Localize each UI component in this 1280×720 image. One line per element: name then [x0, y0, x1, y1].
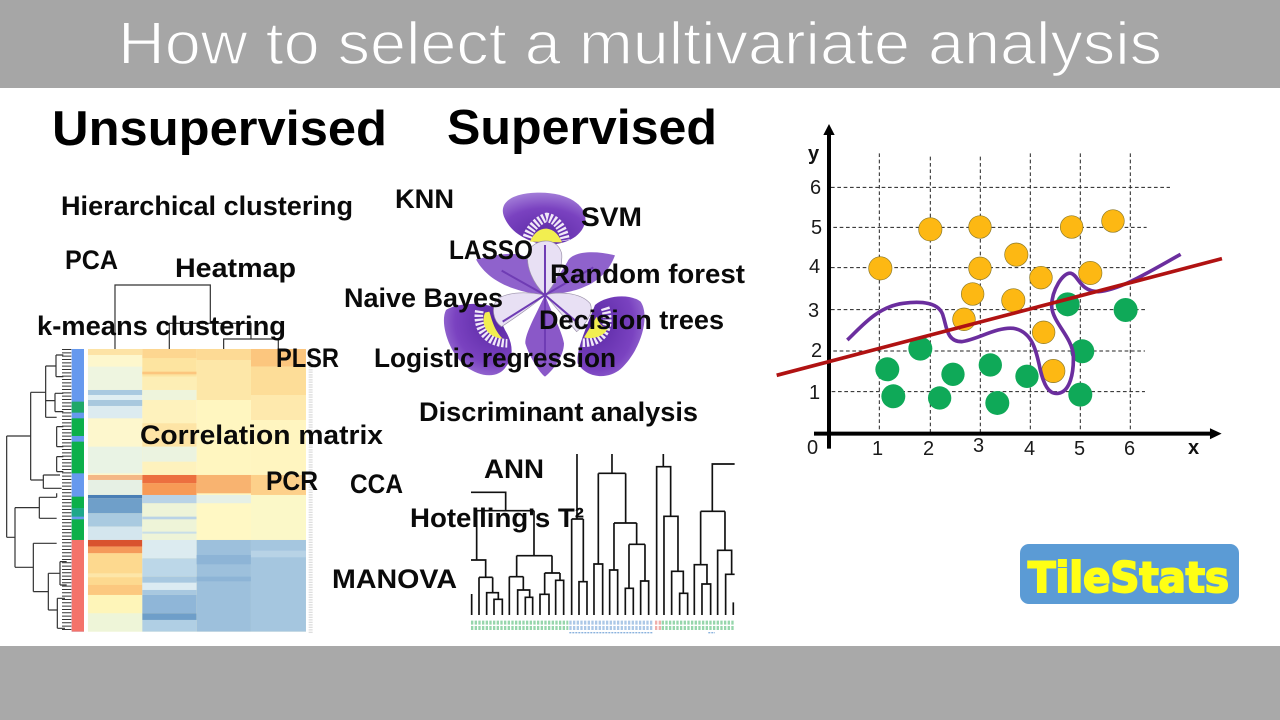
- axes: [814, 124, 1222, 449]
- method labels: ANN: [484, 454, 544, 484]
- axis labels: y: [808, 143, 820, 165]
- axis labels: 0: [807, 437, 818, 459]
- method labels: Hierarchical clustering: [61, 191, 353, 221]
- axis labels: 3: [808, 300, 819, 322]
- petal bottom left: [444, 304, 512, 375]
- method labels: Decision trees: [539, 305, 724, 335]
- white rays and yellow throats: [479, 217, 607, 343]
- sample dendrogram: [471, 454, 735, 633]
- row dendrogram: [7, 349, 67, 632]
- method labels: Heatmap: [175, 253, 296, 283]
- method labels: CCA: [350, 469, 403, 499]
- axis labels: 2: [923, 438, 934, 460]
- veins: [502, 245, 593, 363]
- title: How to select a multivariate analysis: [118, 10, 1162, 77]
- row colour bar: [72, 349, 84, 632]
- method labels: Random forest: [550, 259, 745, 289]
- method labels: PCR: [266, 466, 318, 496]
- logo wordmark: TileStats: [1028, 553, 1229, 602]
- axis labels: 4: [1024, 438, 1035, 460]
- yellow points: [869, 210, 1124, 383]
- method labels: SVM: [581, 202, 642, 232]
- scatter chart: [777, 124, 1222, 449]
- method labels: MANOVA: [332, 564, 457, 594]
- axis labels: [807, 143, 1199, 460]
- leaf labels: [471, 623, 735, 628]
- method labels: k-means clustering: [37, 311, 286, 341]
- axis labels: 3: [973, 435, 984, 457]
- sepal left: [476, 254, 545, 295]
- axis labels: x: [1188, 437, 1199, 459]
- sepal right: [545, 252, 615, 295]
- style arms: [493, 241, 591, 332]
- row labels: [305, 349, 317, 633]
- green points: [875, 292, 1138, 415]
- petal top: [503, 193, 585, 245]
- petal bottom right: [577, 296, 645, 376]
- non-linear boundary: [847, 254, 1181, 393]
- heading: unsupervised: Unsupervised: [52, 102, 387, 156]
- sepal bottom: [525, 295, 564, 377]
- axis labels: 6: [1124, 438, 1135, 460]
- axis labels: 5: [1074, 438, 1085, 460]
- method labels: Correlation matrix: [140, 420, 383, 450]
- axis labels: 1: [809, 382, 820, 404]
- axis labels: 2: [811, 340, 822, 362]
- dendrogram branches: [471, 454, 735, 615]
- method labels: Hotelling's T²: [410, 503, 584, 533]
- heatmap cells: [7, 285, 311, 633]
- method labels: PCA: [65, 245, 118, 275]
- method labels: PLSR: [276, 343, 339, 373]
- method labels: KNN: [395, 184, 454, 214]
- heading: supervised: Supervised: [447, 101, 717, 155]
- heatmap with dendrograms: [7, 285, 311, 633]
- axis labels: 1: [872, 438, 883, 460]
- method labels: LASSO: [449, 235, 533, 265]
- method labels: Discriminant analysis: [419, 397, 698, 427]
- method labels: [37, 184, 745, 594]
- logo: [1020, 544, 1239, 604]
- title bar: [0, 0, 1280, 88]
- column dendrogram: [115, 285, 278, 349]
- bottom bar: [0, 646, 1280, 720]
- linear boundary: [777, 259, 1222, 375]
- method labels: Logistic regression: [374, 343, 616, 373]
- iris flower: [444, 193, 645, 377]
- method labels: Naive Bayes: [344, 283, 503, 313]
- axis labels: 4: [809, 256, 820, 278]
- axis labels: 5: [811, 217, 822, 239]
- grid: [831, 153, 1170, 434]
- axis labels: 6: [810, 177, 821, 199]
